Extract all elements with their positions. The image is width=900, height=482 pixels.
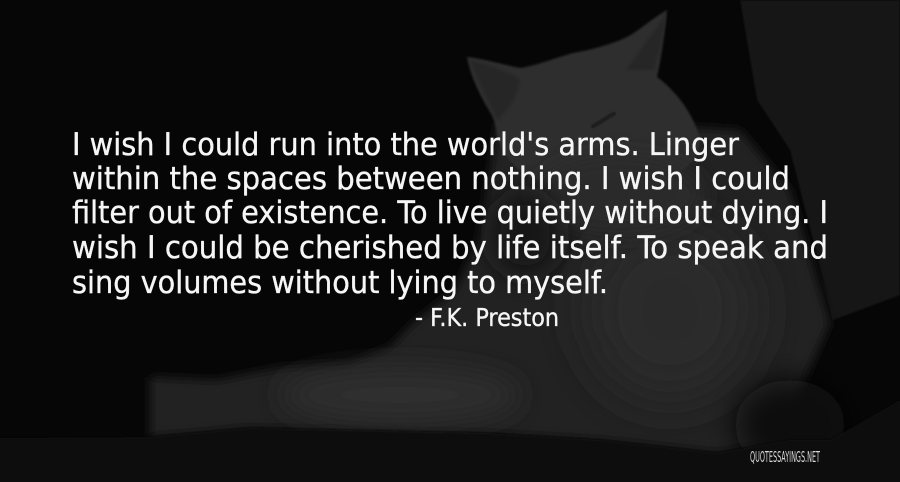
attribution: - F.K. Preston <box>415 303 559 332</box>
wall panel behind cat <box>740 0 900 320</box>
closed eye <box>592 113 615 127</box>
left inner ear <box>470 60 520 120</box>
quote text: sing volumes without lying to myself. <box>72 265 608 301</box>
shadow under chin <box>490 193 560 277</box>
chest fur highlight <box>585 220 755 400</box>
quote text <box>72 127 828 301</box>
foreground surface <box>0 400 900 482</box>
quote text: within the spaces between nothing. I wish I could <box>72 161 790 197</box>
right inner ear <box>626 14 666 70</box>
quote text: filter out of existence. To live quietly without dying. I <box>72 195 828 231</box>
quote text: I wish I could run into the world's arms. Linger <box>72 127 739 163</box>
cat photo <box>150 10 845 470</box>
cat head <box>467 10 700 190</box>
head to chest blend <box>535 155 705 235</box>
tail fur highlight <box>280 367 520 423</box>
quote text: wish I could be cherished by life itself. To speak and <box>72 230 828 266</box>
cat body <box>150 123 830 453</box>
lower right fade <box>735 380 845 470</box>
